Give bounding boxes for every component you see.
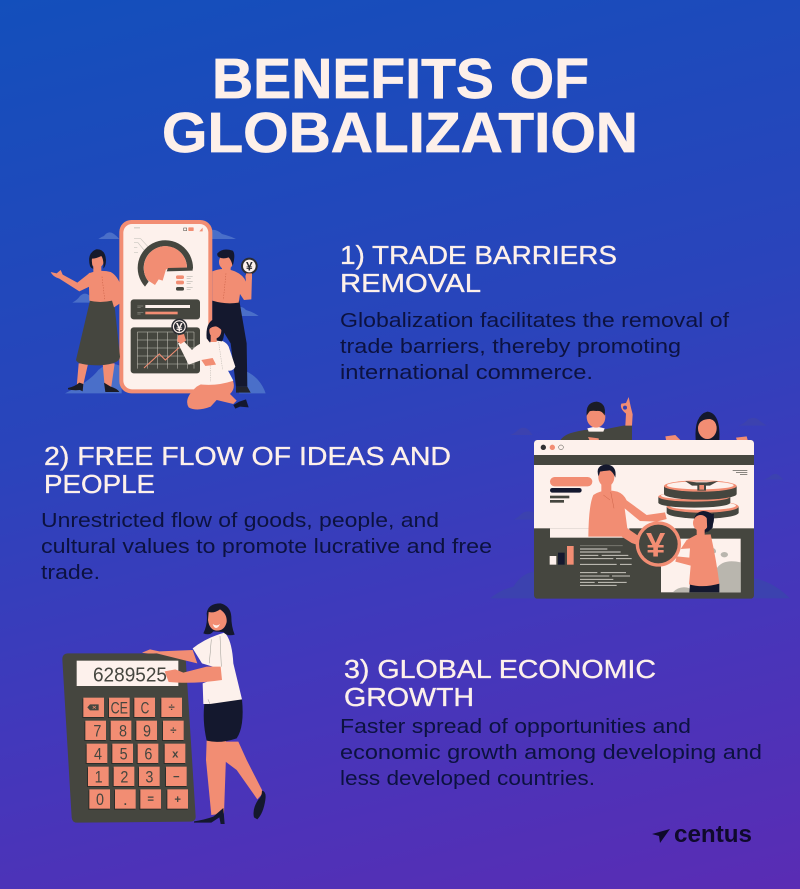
paragraph lines	[580, 546, 632, 585]
heading 3: 3) GLOBAL ECONOMIC	[344, 654, 656, 684]
big yen coin: ¥	[646, 527, 666, 565]
calculator keys: −	[173, 771, 180, 783]
yen coin: ¥	[176, 320, 183, 334]
illustration: woman with calculator	[62, 603, 266, 824]
calculator keys: 4	[94, 744, 102, 763]
man in hero	[588, 464, 667, 547]
section 1 text	[340, 240, 730, 384]
skirt	[204, 699, 243, 742]
woman kneeling	[177, 319, 249, 410]
calculator keys: 6	[144, 744, 152, 763]
calculator keys: +	[174, 794, 181, 806]
woman standing left	[51, 249, 122, 392]
heading 2	[44, 441, 451, 499]
calculator keys: .	[123, 790, 128, 809]
calculator keys: CE	[111, 698, 128, 717]
body 1	[340, 310, 730, 384]
body 1: trade barriers, thereby promoting	[340, 336, 681, 358]
line chart panel	[131, 327, 200, 373]
hair and head	[203, 603, 235, 635]
body 2	[41, 510, 492, 584]
heading 3	[344, 654, 656, 712]
big yen coin	[636, 521, 681, 567]
calculator keys: 9	[143, 721, 151, 740]
body 3	[340, 716, 762, 790]
calculator keys: ÷	[170, 725, 176, 737]
woman peeking	[665, 412, 748, 446]
bar chart	[550, 546, 574, 565]
body 2: Unrestricted flow of goods, people, and	[41, 510, 439, 532]
calculator keys: x	[172, 748, 179, 760]
title: BENEFITS OF	[212, 47, 589, 111]
heading 1	[340, 240, 617, 298]
calculator keys	[82, 698, 188, 810]
blouse	[193, 633, 242, 704]
body 3: economic growth among developing and	[340, 742, 762, 764]
man peeking with ok gesture	[559, 397, 633, 447]
browser window	[534, 440, 754, 599]
calculator body	[62, 653, 196, 823]
yen coin	[171, 319, 187, 335]
woman leaning on calculator	[142, 603, 266, 824]
body 2: trade.	[41, 562, 100, 584]
calculator keys: 0	[96, 790, 104, 809]
calculator keys: C	[141, 698, 149, 717]
section 3 text	[340, 654, 762, 790]
progress panel	[131, 299, 200, 319]
man standing right	[212, 249, 258, 393]
title	[162, 47, 638, 165]
man standing right: ¥	[246, 260, 253, 274]
picture frame	[661, 539, 741, 592]
section 2 text	[41, 441, 492, 584]
illustration: team with phone dashboard	[51, 220, 266, 410]
heading 2: 2) FREE FLOW OF IDEAS AND	[44, 441, 451, 471]
heading 1: REMOVAL	[340, 268, 481, 298]
illustration: website window with people and coins	[490, 397, 790, 599]
coin stacks	[658, 480, 739, 519]
body 3: Faster spread of opportunities and	[340, 716, 691, 738]
calculator keys: 7	[93, 721, 101, 740]
legs	[206, 740, 226, 815]
title: GLOBALIZATION	[162, 101, 638, 165]
logo: centus: centus	[674, 821, 752, 848]
calculator keys: =	[147, 794, 154, 806]
heading 1: 1) TRADE BARRIERS	[340, 240, 617, 270]
gauge chart	[138, 240, 193, 291]
body 2: cultural values to promote lucrative and free	[41, 536, 492, 558]
calculator display: 6289525	[93, 664, 167, 687]
calculator keys: 5	[120, 744, 128, 763]
phone	[119, 220, 212, 393]
woman in frame	[675, 511, 719, 592]
calculator keys: 3	[145, 767, 153, 786]
clouds	[65, 230, 266, 393]
calculator keys: 1	[95, 767, 103, 786]
calculator keys: 2	[120, 767, 128, 786]
body 1: international commerce.	[340, 362, 593, 384]
calculator display	[77, 661, 178, 687]
calculator keys: ÷	[169, 702, 175, 714]
faint clouds	[490, 418, 790, 598]
heading 2: PEOPLE	[44, 469, 155, 499]
body 1: Globalization facilitates the removal of	[340, 310, 730, 332]
body 3: less developed countries.	[340, 768, 595, 790]
calculator keys: 8	[119, 721, 127, 740]
arms	[142, 649, 197, 663]
heading 3: GROWTH	[344, 682, 474, 712]
hero text blocks	[550, 477, 592, 503]
